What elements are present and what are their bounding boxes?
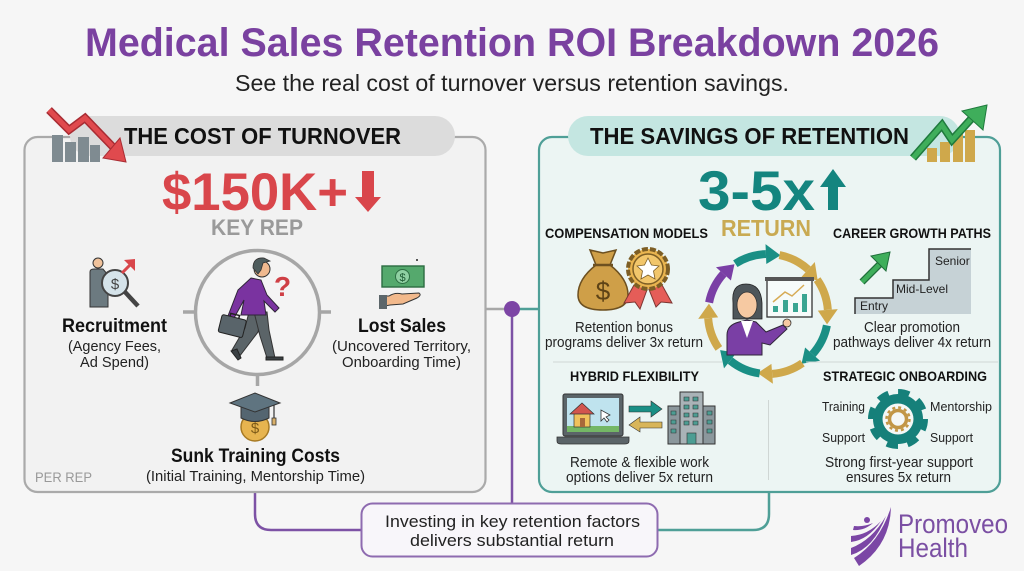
presentation board xyxy=(765,277,814,317)
callout xyxy=(362,504,658,556)
icon: graduation cap with coin xyxy=(230,393,280,441)
icon: laptop and house xyxy=(557,394,629,444)
block: recruitment xyxy=(62,258,168,371)
return label: RETURN xyxy=(721,215,811,241)
block: lost sales xyxy=(332,259,471,371)
icon: graduation cap with coin: $ xyxy=(251,420,260,437)
icon: down arrow xyxy=(355,171,381,212)
sub-label: (Uncovered Territory, xyxy=(332,338,471,355)
icon: office building xyxy=(668,392,715,444)
per rep label: PER REP xyxy=(35,469,92,485)
icon: recruitment magnifier: $ xyxy=(111,276,120,293)
description line 2: options deliver 5x return xyxy=(566,470,713,486)
icon: onboarding gear xyxy=(872,393,924,445)
description line 2: ensures 5x return xyxy=(846,470,951,486)
icon: money bag and medal: $ xyxy=(596,276,611,306)
callout: delivers substantial return xyxy=(410,531,614,550)
icon: falling chart xyxy=(49,110,126,162)
icon: walking rep in circle xyxy=(183,250,331,386)
logo text line 2: Health xyxy=(898,533,968,563)
header pill xyxy=(568,116,960,156)
icon: career stairs: Senior xyxy=(935,254,970,268)
logo: promoveo health xyxy=(851,507,1008,566)
label: Lost Sales xyxy=(358,316,446,337)
heading: the savings of retention: THE SAVINGS OF RETENTION xyxy=(590,123,909,149)
icon: walking rep in circle: ? xyxy=(274,271,291,302)
sub-label: (Agency Fees, xyxy=(68,338,161,355)
panel background xyxy=(24,137,486,492)
description: Clear promotion xyxy=(864,320,960,336)
icon: career stairs: Entry xyxy=(860,299,888,313)
panel: cost of turnover xyxy=(24,110,486,492)
header pill xyxy=(70,116,455,156)
description: Retention bonus xyxy=(575,320,673,336)
cycle arrows xyxy=(695,241,841,387)
sub-label line 2: Onboarding Time) xyxy=(342,354,461,371)
key rep label: KEY REP xyxy=(211,215,303,240)
icon: exchange arrows xyxy=(629,401,662,432)
big number: $150K+ xyxy=(162,163,348,222)
description line 2: pathways deliver 4x return xyxy=(833,335,991,351)
icon: growth cycle with presenter xyxy=(695,241,841,387)
heading: COMPENSATION MODELS xyxy=(545,225,708,241)
title: Medical Sales Retention ROI Breakdown 2026 xyxy=(85,21,939,65)
icon: up arrow xyxy=(820,169,846,210)
block: strategic onboarding xyxy=(822,368,992,486)
subtitle: See the real cost of turnover versus retention savings. xyxy=(235,70,789,96)
connector dot xyxy=(504,301,520,317)
sub-label line 2: Ad Spend) xyxy=(80,354,149,371)
label: support right: Support xyxy=(930,431,974,445)
label: Recruitment xyxy=(62,316,168,337)
heading: HYBRID FLEXIBILITY xyxy=(570,368,700,384)
panel: savings of retention xyxy=(539,105,1000,492)
block: sunk training costs xyxy=(146,393,365,485)
description: Strong first-year support xyxy=(825,455,973,471)
panel background xyxy=(539,137,1000,492)
logo text: Promoveo xyxy=(898,509,1008,539)
heading: STRATEGIC ONBOARDING xyxy=(823,368,987,384)
block: career growth paths xyxy=(833,225,991,351)
heading: CAREER GROWTH PATHS xyxy=(833,225,991,241)
label: mentorship: Mentorship xyxy=(930,400,992,414)
label: support left: Support xyxy=(822,431,866,445)
icon: rising chart xyxy=(913,105,987,162)
description: Remote & flexible work xyxy=(570,455,710,471)
callout: Investing in key retention factors xyxy=(385,512,640,531)
icon: career stairs: Mid-Level xyxy=(896,282,948,296)
block: hybrid flexibility xyxy=(557,368,715,486)
icon: money in hand: $ xyxy=(399,272,406,284)
icon: career stairs xyxy=(855,249,971,314)
heading: the cost of turnover: THE COST OF TURNOVER xyxy=(124,123,401,149)
presenter xyxy=(727,284,791,355)
label: Sunk Training Costs xyxy=(171,446,340,467)
big multiplier: 3-5x xyxy=(698,159,815,222)
block: compensation models xyxy=(545,225,708,351)
sub-label: (Initial Training, Mentorship Time) xyxy=(146,468,365,485)
description line 2: programs deliver 3x return xyxy=(545,335,703,351)
logo swoosh xyxy=(851,507,891,566)
connector lines xyxy=(255,309,769,530)
icon: money bag and medal xyxy=(578,249,672,310)
label: training: Training xyxy=(822,400,865,414)
